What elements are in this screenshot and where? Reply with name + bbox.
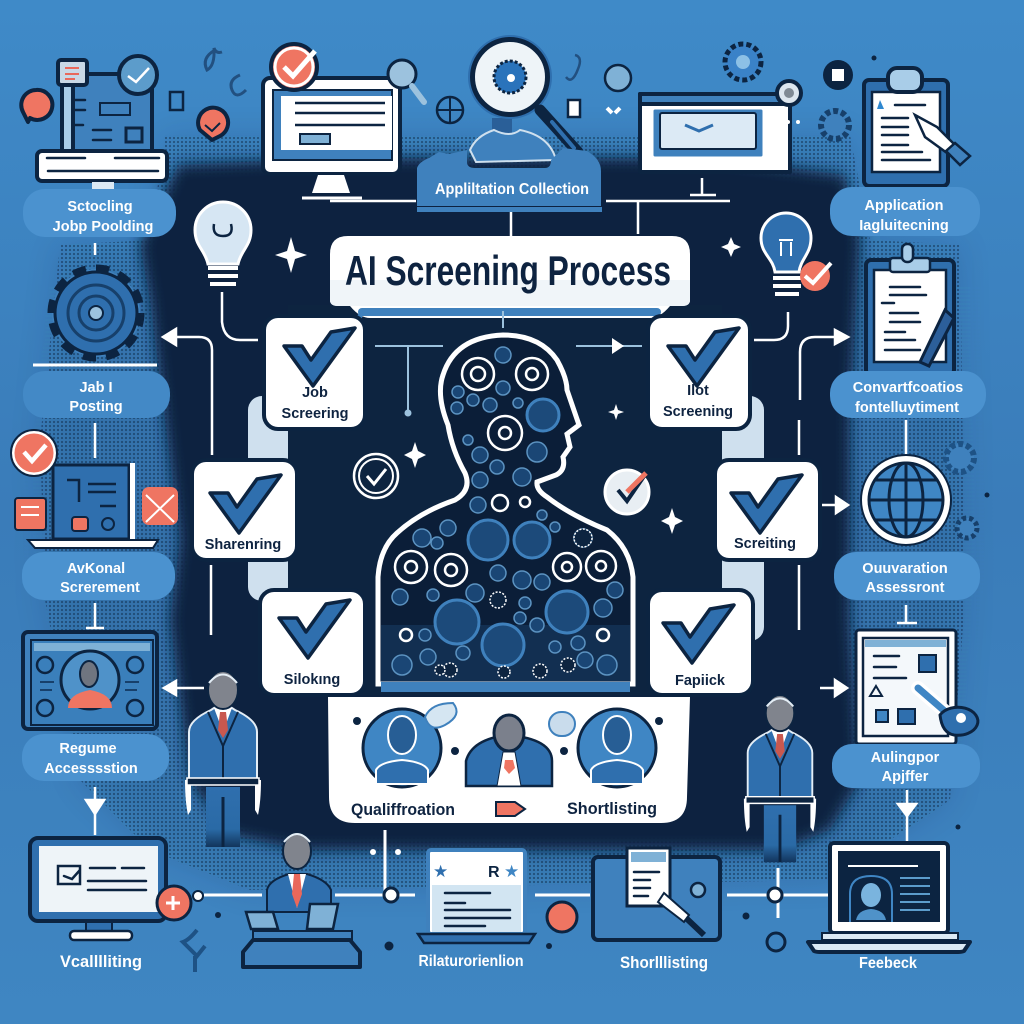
left figure xyxy=(185,671,261,847)
panel: qualification and shortlisting: Shortlisting xyxy=(567,799,657,818)
pill: Job I Posting: Posting xyxy=(69,399,123,415)
card: Ilot Screening: Screening xyxy=(663,404,733,420)
avatar left xyxy=(363,709,441,787)
pill: Application Engineering: Iagluitecning xyxy=(859,218,949,234)
icon: clipboard with hand xyxy=(864,68,970,186)
pill: Convartifocatios fontelluytiment xyxy=(830,371,986,418)
pill: Application Engineering: Application xyxy=(865,198,943,214)
pill: Scoloding Job Poolding xyxy=(23,189,176,237)
pill: Ouuvaration Assessront: Ouuvaration xyxy=(862,561,948,577)
head silhouette with AI icons xyxy=(378,335,633,692)
card: Job Screering: Job xyxy=(302,385,328,401)
connector bottom xyxy=(183,824,960,972)
pill: Job I Posting xyxy=(23,371,170,418)
pill: Scoloding Job Poolding: Jobp Poolding xyxy=(53,219,153,235)
dark central backdrop xyxy=(40,135,965,890)
pill: Regume Accesssstion: Regume xyxy=(59,741,117,757)
pill: Avkonal Screrement xyxy=(22,552,175,600)
panel: monitor top right xyxy=(638,44,876,234)
pill: Ouuvaration Assessront xyxy=(834,552,980,600)
icon: rating document: ★ xyxy=(504,862,519,881)
panel: monitor top xyxy=(263,44,400,198)
icon: bulb right with red check xyxy=(721,213,831,340)
card: Screiting xyxy=(715,460,820,560)
connector lines xyxy=(33,201,917,842)
pill: Scoloding Job Poolding: Sctocling xyxy=(67,199,133,215)
icon: rating document xyxy=(418,850,535,943)
icon: tablet with document xyxy=(593,848,720,940)
pill: Ouuvaration Assessront: Assessront xyxy=(866,580,945,596)
card: Job Screering xyxy=(264,316,365,429)
title xyxy=(330,236,690,318)
blue ring icons xyxy=(435,399,588,666)
label: Application Collection: Appliltation Collection xyxy=(435,181,589,198)
pill: Convartifocatios fontelluytiment: Convartfcoatios xyxy=(853,380,963,396)
icon: magnifier over person xyxy=(388,36,631,162)
card: Fapiick xyxy=(648,590,753,695)
panel: qualification and shortlisting xyxy=(328,697,690,823)
card: Ilot Screening: Ilot xyxy=(687,383,709,399)
white ring icons xyxy=(395,358,616,641)
white frame bars xyxy=(248,396,764,641)
center frame xyxy=(288,305,722,695)
dotted white icons xyxy=(435,529,592,678)
label: Vcalllliting: Vcalllliting xyxy=(60,952,142,971)
left column: gear xyxy=(52,269,140,357)
right column: clipboard with pen xyxy=(866,244,954,375)
pill: Aulingpor Apjffer: Apjffer xyxy=(882,769,929,785)
card: Screiting: Screiting xyxy=(734,536,796,552)
icon: laptop with profile xyxy=(808,843,970,952)
presenter at desk xyxy=(243,833,360,967)
label: Rilaturorienlion: Rilaturorienlion xyxy=(418,953,524,970)
pill: Convartifocatios fontelluytiment: fontelluytiment xyxy=(855,400,959,416)
panel: Job Posting machine top-left xyxy=(21,48,246,190)
icon: check badge right xyxy=(605,404,683,534)
icon: check badge left xyxy=(354,442,426,498)
card: Job Screering: Screering xyxy=(282,406,348,422)
small icons xyxy=(392,347,623,675)
pill: Application Engineering xyxy=(830,187,980,236)
label: Shorlllisting: Shorlllisting xyxy=(620,953,708,972)
label: Feebeck: Feebeck xyxy=(859,955,917,972)
icon: rating document: ★ xyxy=(433,862,448,881)
icon: monitor with plus xyxy=(30,838,203,940)
avatar right xyxy=(578,709,656,787)
pill: Aulingpor Apjffer xyxy=(832,744,980,788)
pill: Regume Accesssstion: Accesssstion xyxy=(44,761,138,777)
pill: Aulingpor Apjffer: Aulingpor xyxy=(871,750,940,766)
card: Silokıng xyxy=(260,590,365,695)
icon: red badge xyxy=(547,902,577,932)
right figure xyxy=(744,695,816,862)
icon: sparkle xyxy=(275,237,307,273)
pill: Job I Posting: Jab I xyxy=(79,380,113,396)
card: Silokıng: Silokıng xyxy=(284,672,340,688)
pill: Avkonal Screrement: Screrement xyxy=(60,580,140,596)
icon: bulb left xyxy=(195,202,258,340)
card: Fapiick: Fapiick xyxy=(675,673,726,689)
icon: globe xyxy=(861,444,990,545)
inner connector marks xyxy=(375,311,642,416)
card: Sharenring: Sharenring xyxy=(205,537,281,553)
icon: rating document: R xyxy=(488,864,500,881)
pill: Regume Accesssstion xyxy=(22,734,169,781)
title: AI Screening Process xyxy=(345,247,671,294)
card: Ilot Screening xyxy=(648,316,750,429)
icon: monitor with person xyxy=(23,632,157,729)
panel: qualification and shortlisting: Qualiffroation xyxy=(351,800,455,819)
icon: document with key xyxy=(856,630,978,744)
presenter center xyxy=(466,715,552,786)
pill: Avkonal Screrement: AvKonal xyxy=(67,561,125,577)
label: Application Collection xyxy=(417,148,602,212)
icon: monitor with red check xyxy=(11,430,178,548)
card: Sharenring xyxy=(192,460,297,560)
